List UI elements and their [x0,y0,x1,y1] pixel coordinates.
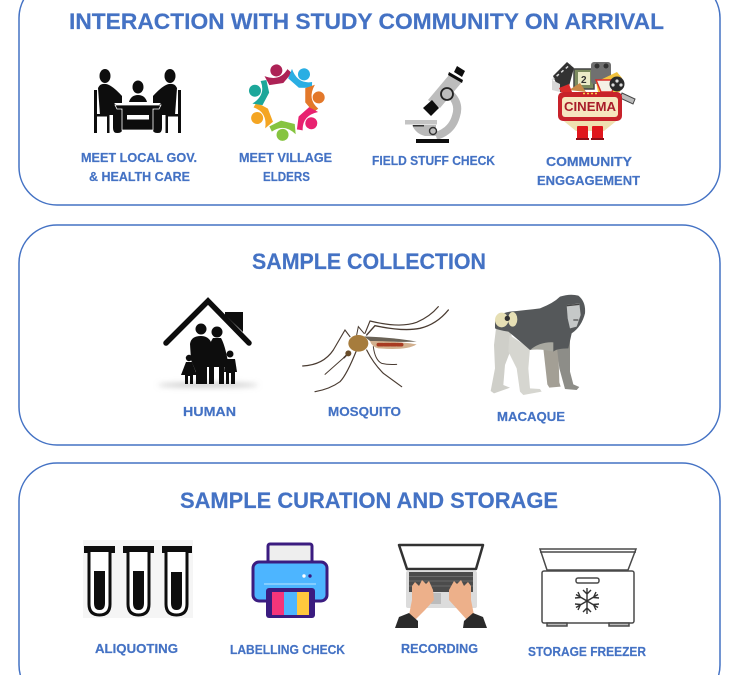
icon: meeting around table [94,69,181,133]
label: meet village elders [239,150,332,184]
label: meet local gov: MEET LOCAL GOV. [81,150,197,165]
label: labelling check: LABELLING CHECK [230,642,346,657]
label: meet local gov: & HEALTH CARE [89,169,190,184]
label: aliquoting: ALIQUOTING [95,641,178,656]
label: community engagement: ENGGAGEMENT [537,173,640,188]
icon: cinema marquee [552,62,635,140]
label: mosquito: MOSQUITO [328,404,401,419]
heading: sample curation: SAMPLE CURATION AND STORAGE [180,488,558,513]
icon: cinema marquee: CINEMA [564,100,616,114]
icon: village elders circle [245,61,327,142]
panel: interaction with study community [19,0,720,205]
label: human: HUMAN [183,404,236,419]
heading: interaction: INTERACTION WITH STUDY COMMUNITY ON ARRIVAL [69,9,664,34]
icon: microscope [405,66,465,143]
label: meet local gov [81,150,197,184]
label: community engagement: COMMUNITY [546,154,632,169]
icon: mosquito [303,307,448,392]
icon: printer [253,544,327,618]
heading: sample collection: SAMPLE COLLECTION [252,249,486,274]
icon: family under house roof [158,301,258,387]
label: community engagement [537,154,640,188]
label: meet village elders: ELDERS [263,169,310,184]
label: meet village elders: MEET VILLAGE [239,150,332,165]
icon: storage freezer [540,549,636,626]
icon: macaque [491,295,585,395]
panel: sample curation and storage [19,463,720,675]
label: recording: RECORDING [401,641,478,656]
icon: test tubes [83,540,193,618]
icon: hands on laptop [395,545,487,628]
icon: cinema marquee: 2 [581,75,587,86]
label: storage freezer: STORAGE FREEZER [528,644,647,659]
label: field stuff check: FIELD STUFF CHECK [372,153,496,168]
label: macaque: MACAQUE [497,409,565,424]
panel: sample collection [19,225,720,445]
